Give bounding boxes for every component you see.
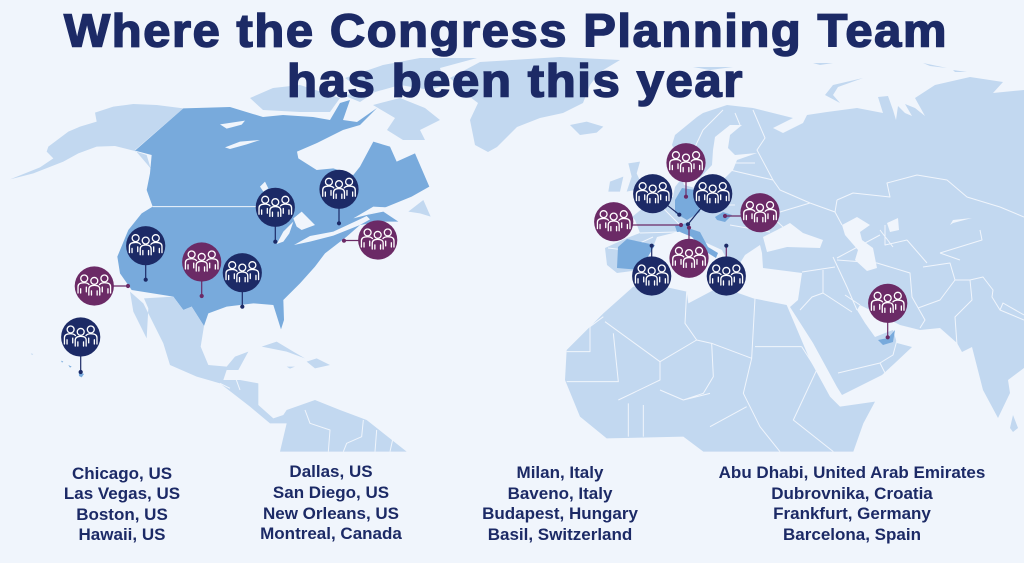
list: other international cities: Frankfurt, Germany <box>773 504 931 523</box>
pin: New Orleans <box>223 253 262 309</box>
map: Greenland <box>450 57 620 152</box>
pin: Boston <box>342 220 397 260</box>
pin: Milan <box>686 174 732 226</box>
list: US cities: Hawaii, US <box>79 525 165 544</box>
list: other international cities: Dubrovnika, Croatia <box>771 484 933 503</box>
title: Where the Congress Planning Team <box>64 4 948 56</box>
list: US cities: Las Vegas, US <box>64 484 180 503</box>
list: North American cities: Montreal, Canada <box>260 524 402 543</box>
list: North American cities: New Orleans, US <box>263 504 399 523</box>
list: central European cities <box>482 463 638 544</box>
title <box>64 4 948 106</box>
pin: Budapest <box>723 193 780 232</box>
list: North American cities: San Diego, US <box>273 483 389 502</box>
map: highlighted countries <box>617 188 895 345</box>
pin: Frankfurt <box>666 143 706 199</box>
pin: Abu Dhabi <box>868 284 907 339</box>
map: Europe and Asia <box>605 63 1024 432</box>
title: has been this year <box>287 54 744 106</box>
pin: Dubrovnik <box>707 244 746 296</box>
pin: Barcelona <box>632 244 671 296</box>
list: other international cities <box>719 463 985 544</box>
map: Canadian Arctic islands <box>250 58 477 140</box>
map: Africa and British Isles <box>565 122 875 452</box>
list: central European cities: Basil, Switzerland <box>488 525 632 544</box>
list: central European cities: Baveno, Italy <box>508 484 613 503</box>
list: US cities: Chicago, US <box>72 464 172 483</box>
list: US cities <box>64 464 180 544</box>
list: other international cities: Barcelona, Spain <box>783 525 921 544</box>
map: North America <box>10 100 431 452</box>
list: US cities: Boston, US <box>76 505 168 524</box>
pin: Basil <box>633 174 681 217</box>
list: other international cities: Abu Dhabi, United Arab Emirates <box>719 463 985 482</box>
list: central European cities: Budapest, Hungary <box>482 504 638 523</box>
pin: Chicago <box>256 188 295 244</box>
list: North American cities: Dallas, US <box>289 462 373 481</box>
pin: Baveno <box>594 202 683 241</box>
pin: Montreal <box>319 170 359 225</box>
pin: Hawaii <box>61 317 100 374</box>
list: central European cities: Milan, Italy <box>517 463 604 482</box>
pin: Italy south <box>669 226 709 278</box>
pin: San Diego <box>75 266 130 306</box>
list: North American cities <box>260 462 402 543</box>
pin: Las Vegas <box>126 226 165 282</box>
world map <box>10 57 1024 452</box>
pin: Dallas <box>182 242 221 298</box>
